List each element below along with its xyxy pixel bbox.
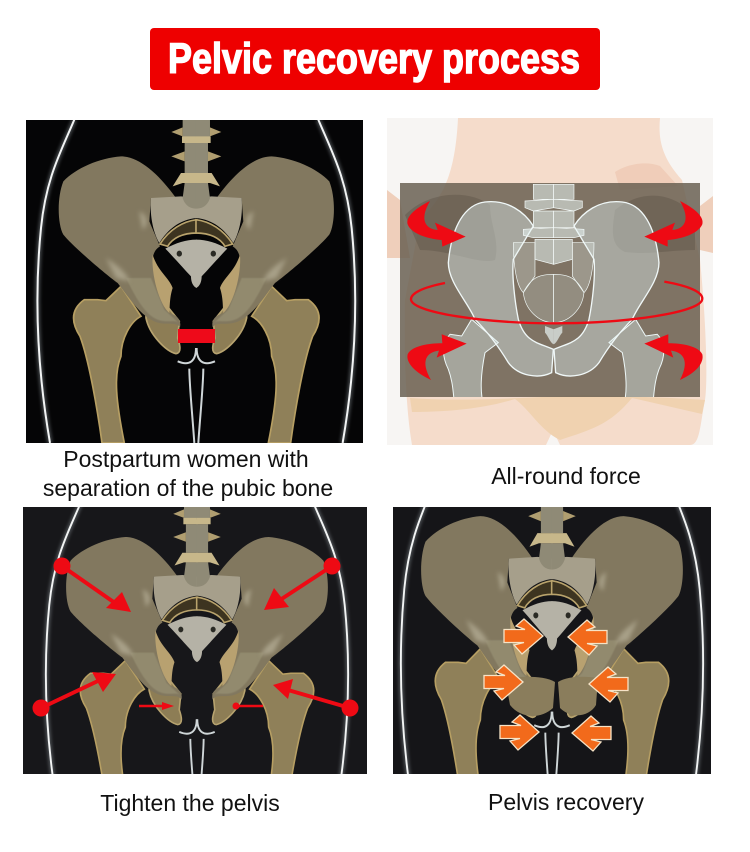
closed pubic bones <box>505 677 598 716</box>
arrow: top right <box>568 620 607 655</box>
arrow: inner right <box>232 702 263 710</box>
arrow: upper right <box>264 558 340 610</box>
arrow: bottom right <box>572 716 611 751</box>
red force arrows <box>407 201 703 380</box>
caption: postpartum women: separation of the pubic bone <box>43 475 333 501</box>
arrow: lower left <box>407 334 467 380</box>
pelvis skeleton <box>396 507 708 774</box>
pelvis skeleton <box>37 120 355 443</box>
encircling ring <box>411 282 702 323</box>
arrow: upper right <box>644 201 703 247</box>
arrow: lower left <box>32 672 116 716</box>
arrow: lower right <box>644 334 703 380</box>
caption: tighten the pelvis: Tighten the pelvis <box>100 790 280 816</box>
arrow: middle left <box>484 665 523 700</box>
arrow: upper left <box>407 201 466 247</box>
panel: all-round force <box>387 118 713 445</box>
arrow: middle right <box>589 667 628 702</box>
panel: tighten the pelvis <box>23 507 367 774</box>
pelvis skeleton <box>46 502 348 810</box>
arrow: lower right <box>273 679 358 716</box>
red separation marker <box>178 329 215 343</box>
x-ray overlay <box>400 183 700 397</box>
torso photo <box>387 118 713 445</box>
caption: postpartum women <box>43 446 333 501</box>
translucent skeleton <box>444 184 664 409</box>
caption: pelvis recovery: Pelvis recovery <box>488 789 644 815</box>
red tightening arrows <box>32 558 358 716</box>
panel: pelvis recovery <box>393 507 711 774</box>
panel: separated pubic bone <box>26 120 363 443</box>
arrow: top left <box>504 619 543 654</box>
caption: all-round force: All-round force <box>491 463 641 489</box>
arrow: bottom left <box>500 715 539 750</box>
arrow: inner left <box>139 702 174 710</box>
title banner: Pelvic recovery process <box>168 35 580 83</box>
hands under overlay <box>405 195 695 254</box>
arrow: upper left <box>54 558 131 612</box>
orange closing arrows <box>484 619 628 751</box>
title banner <box>150 28 600 90</box>
caption: postpartum women: Postpartum women with <box>63 446 309 472</box>
